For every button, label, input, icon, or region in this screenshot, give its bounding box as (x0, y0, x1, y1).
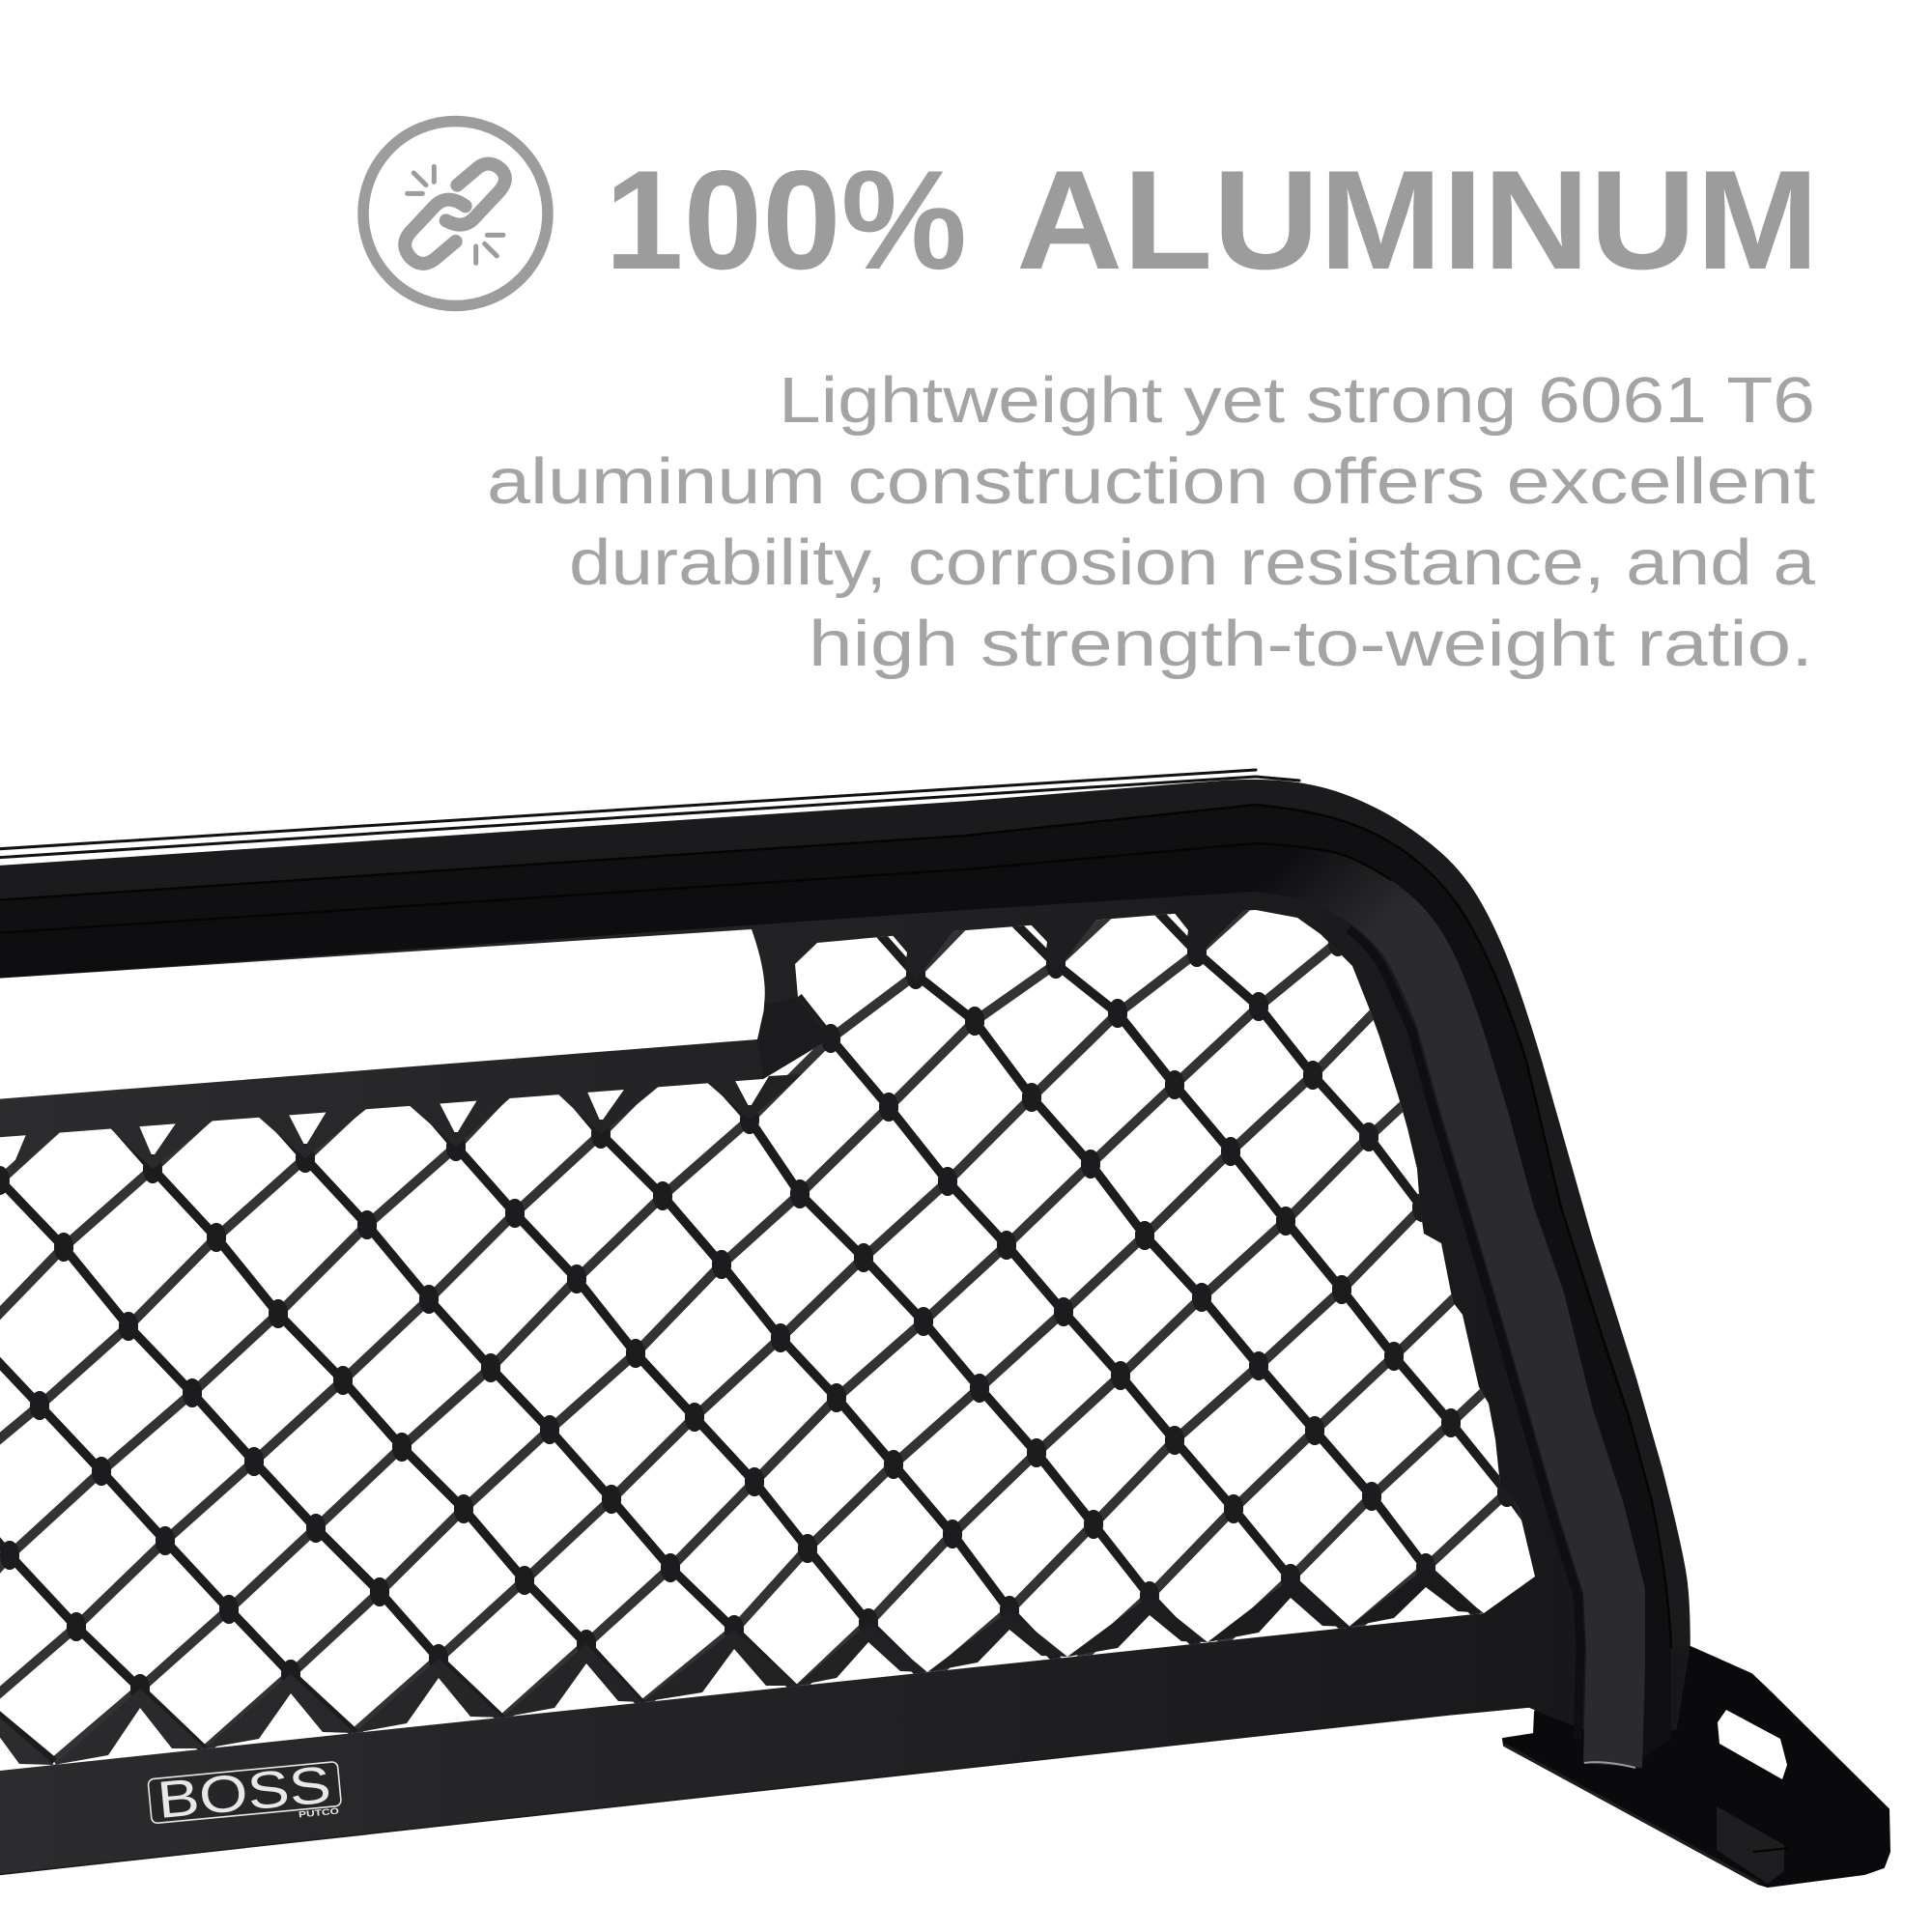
description text (487, 364, 1816, 680)
mesh junction patch by cutout (757, 997, 831, 1079)
mounting bracket silhouette (1503, 1642, 1889, 1887)
windshield cutout (0, 929, 765, 1099)
logo badge: BOSS (147, 1754, 342, 1833)
description text: aluminum construction offers excellent (487, 445, 1815, 518)
mesh strands: down-right (0, 898, 1546, 1762)
rail inner shadow (1349, 929, 1580, 1739)
title (605, 141, 1819, 298)
title: ALUMINUM (1016, 141, 1819, 298)
description text: durability, corrosion resistance, and a (569, 526, 1816, 599)
top rail highlights (0, 770, 1299, 858)
icon: broken chain link in circle (363, 122, 548, 305)
mounting bracket details (1504, 1710, 1790, 1884)
frame silhouette (0, 781, 1690, 1875)
logo badge: BOSS: PUTCO (298, 1806, 339, 1819)
diamond mesh (0, 898, 1565, 1787)
rail lighter band (0, 843, 1645, 1768)
product: black aluminum headache rack (0, 770, 1889, 1887)
mesh bottom edge junctions (0, 1568, 1484, 1765)
rail groove (0, 805, 1671, 1758)
mesh strands: up-right (0, 898, 1565, 1762)
rail outer band (0, 781, 1690, 1648)
logo badge: BOSS: BOSS (155, 1755, 333, 1830)
description text: Lightweight yet strong 6061 T6 (779, 364, 1815, 437)
title: 100% (605, 141, 967, 298)
description text: high strength-to-weight ratio. (809, 608, 1813, 680)
mesh top edge junctions (10, 905, 1249, 1174)
rail groove lines (0, 805, 1671, 1648)
